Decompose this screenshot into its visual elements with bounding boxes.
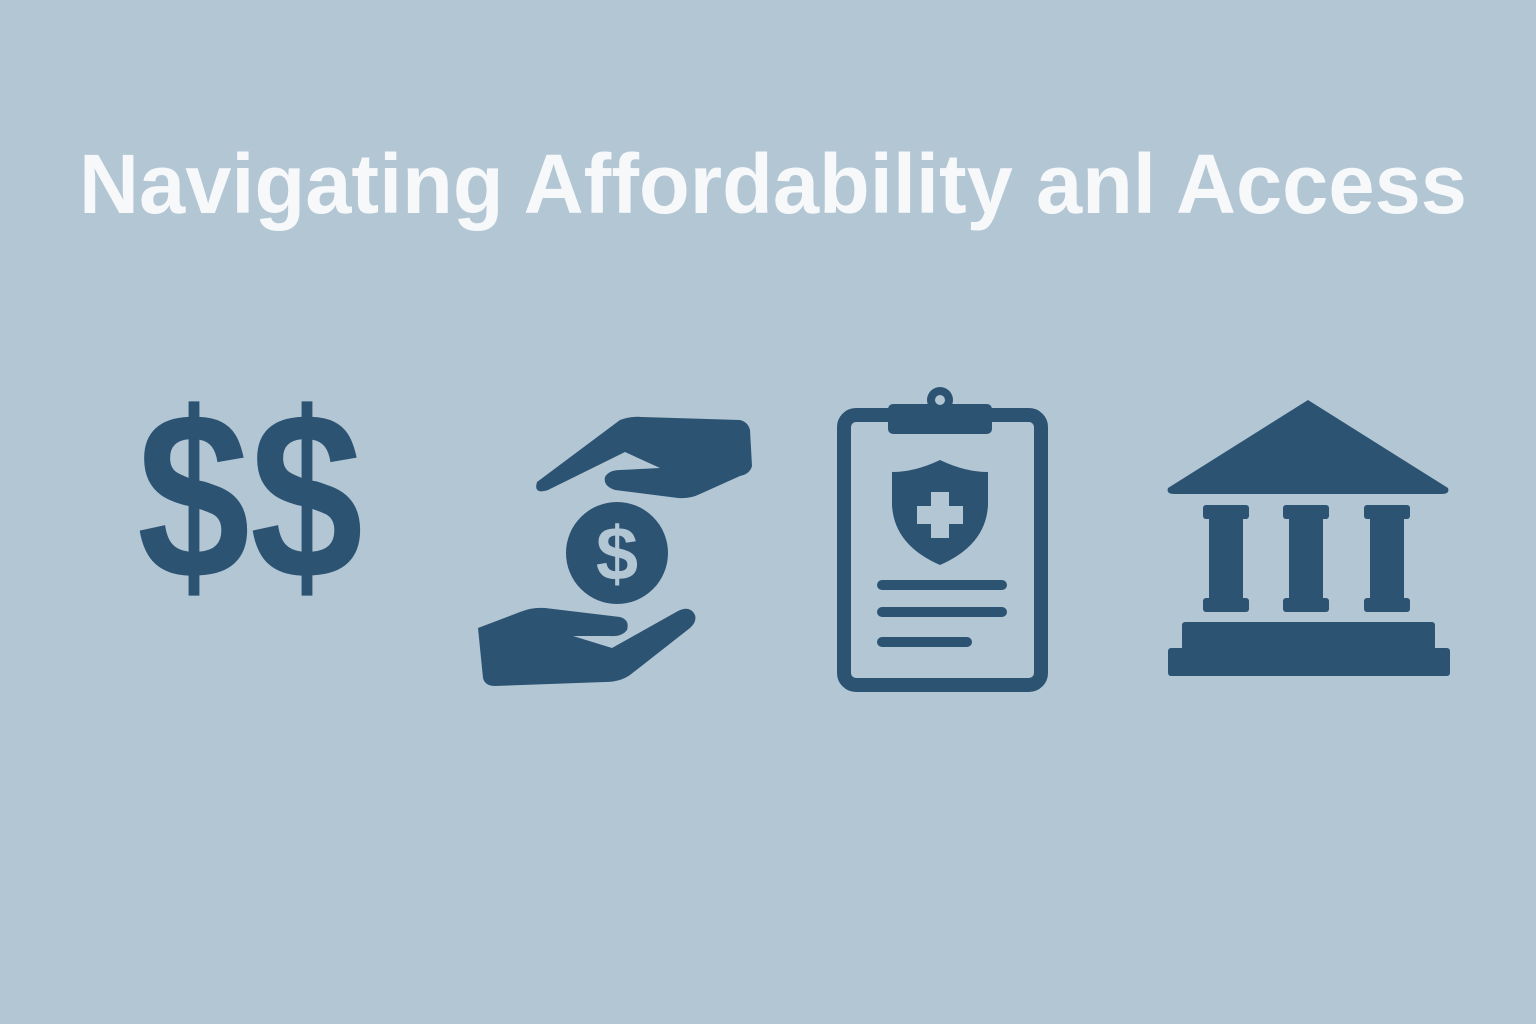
icon: hands with coin	[478, 417, 752, 686]
title: Navigating Affordability anl Access	[79, 137, 1467, 231]
icon: bank building	[1168, 400, 1450, 676]
icon: double dollar: $$	[137, 364, 363, 629]
icon: hands with coin: $	[596, 512, 638, 597]
icon: clipboard with shield	[844, 387, 1041, 685]
